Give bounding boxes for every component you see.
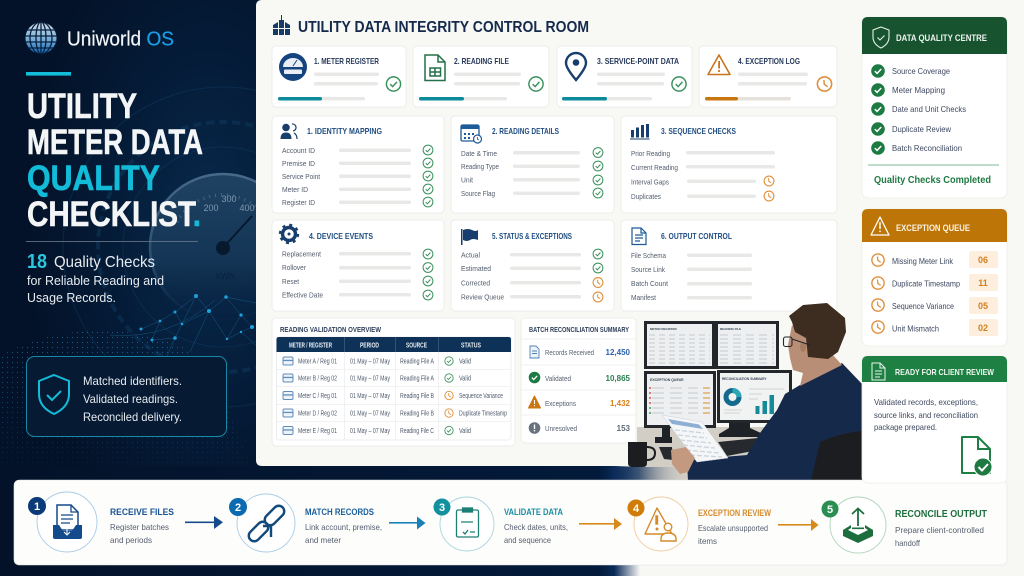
monitor: reading file [715, 321, 779, 369]
process strip [14, 480, 1007, 565]
row: validated: Validated [545, 374, 571, 383]
table: validation rows: 01 May – 07 May [350, 358, 390, 366]
callout: matched identifiers: Validated readings. [83, 392, 178, 406]
icon: shield [873, 27, 889, 48]
title: Utility Meter Data Quality Checklist: CHECKLIST. [27, 195, 201, 234]
panel: data quality centre: Source Coverage [892, 66, 950, 76]
panel: identity mapping: Premise ID [282, 159, 316, 168]
icon: location pin [566, 53, 586, 80]
subtitle: 18 quality checks: for Reliable Reading and [27, 273, 164, 288]
panel: identity mapping [272, 116, 444, 213]
panel: device events: Replacement [282, 250, 322, 258]
panel: status and exceptions: Review Queue [461, 292, 504, 302]
step 5: reconcile output: 5 [827, 504, 833, 516]
icon: people [280, 124, 297, 139]
icon: output tray [843, 508, 873, 543]
panel header [862, 17, 1007, 54]
icon: flag [461, 229, 478, 245]
icon: spreadsheet file [425, 55, 445, 80]
heading: control room: UTILITY DATA INTEGRITY CONTROL ROOM [298, 19, 589, 36]
panel: sequence checks: Prior Reading [631, 149, 670, 158]
hand [671, 447, 695, 474]
table: validation rows: Duplicate Timestamp [459, 410, 507, 418]
decorative meter gauge: kWh [216, 271, 234, 281]
table: validation rows: Meter C / Reg 01 [298, 393, 337, 400]
arrow: step 1 to 2 [185, 516, 223, 529]
panel: identity mapping: Meter ID [282, 185, 309, 194]
analyst [687, 303, 862, 481]
row: validated: 10,865 [606, 374, 631, 383]
icon: calendar clock [461, 125, 482, 143]
panel: status and exceptions: 5. STATUS & EXCEPTIONS [492, 231, 572, 241]
step 2: match records: Link account, premise, [305, 522, 382, 532]
monitor: reading file: READING FILE [720, 327, 741, 331]
row: exceptions: 1,432 [610, 399, 631, 408]
panel: output control: Manifest [631, 293, 657, 302]
panel header [862, 209, 1007, 242]
monitor: reconciliation summary [717, 370, 792, 423]
panel: output control: Source Link [631, 265, 665, 274]
title: Utility Meter Data Quality Checklist [27, 87, 203, 234]
step 1: receive files: RECEIVE FILES [110, 507, 174, 518]
table: validation rows: Meter B / Reg 02 [298, 376, 337, 382]
table: validation rows: 01 May – 07 May [350, 393, 390, 400]
card: exception log: 4. EXCEPTION LOG [738, 56, 800, 66]
logo: Uniworld OS [25, 22, 174, 54]
row: unresolved [529, 422, 631, 434]
accent bar [26, 72, 71, 76]
icon: document [872, 363, 885, 380]
table: validation rows: Valid [459, 376, 471, 382]
monitor: exception queue: EXCEPTION QUEUE [650, 378, 684, 382]
decorative meter gauge: 200 [203, 203, 219, 213]
panel: output control: Batch Count [631, 279, 669, 288]
table: validation rows: Reading File B [400, 393, 434, 400]
panel: reading validation overview: READING VALIDATION OVERVIEW [280, 325, 382, 334]
panel: exception queue: Duplicate Timestamp [892, 278, 960, 288]
step 3: validate data: 3 [439, 502, 445, 514]
panel: status and exceptions: Actual [461, 250, 480, 260]
icon: document [632, 228, 646, 244]
monitor: exception queue [644, 371, 716, 428]
table header: STATUS [461, 342, 481, 350]
panel: output control: 6. OUTPUT CONTROL [661, 231, 732, 241]
panel: batch reconciliation summary: BATCH RECONCILIATION SUMMARY [529, 325, 629, 334]
keyboard and mouse [659, 438, 758, 460]
subtitle: 18 quality checks: Quality Checks [54, 254, 155, 271]
review text [874, 397, 978, 432]
table: validation rows: Reading File B [400, 410, 434, 418]
arrow: step 2 to 3 [389, 516, 426, 530]
panel: reading details: Date & Time [461, 149, 497, 158]
icon: clipboard checklist [456, 508, 478, 537]
panel header: DATA QUALITY CENTRE [896, 33, 987, 43]
table: validation rows: Meter E / Reg 01 [298, 428, 337, 435]
panel header: READY FOR CLIENT REVIEW [895, 367, 995, 377]
step 4: exception review: items [698, 536, 717, 546]
panel: output control [621, 220, 837, 311]
table: validation rows: 01 May – 07 May [350, 428, 390, 435]
panel: data quality centre: Duplicate Review [892, 124, 952, 134]
row: records received: Records Received [545, 348, 594, 357]
table: validation rows: Reading File A [400, 358, 434, 366]
icon: warning [871, 217, 889, 235]
step 4: exception review: Escalate unsupported [698, 523, 768, 533]
card: meter register [272, 46, 406, 107]
step 2: match records: and meter [305, 535, 341, 545]
table: validation rows: Reading File A [400, 376, 434, 382]
panel: identity mapping: Register ID [282, 198, 316, 207]
chair [811, 431, 862, 481]
panel: status and exceptions: Estimated [461, 264, 491, 273]
table: validation rows: Valid [459, 358, 471, 366]
table: validation rows: 01 May – 07 May [350, 410, 390, 418]
desk [612, 427, 812, 481]
panel: reading details [451, 116, 614, 213]
card: service-point data: 3. SERVICE-POINT DATA [597, 56, 679, 66]
main control room panel [256, 0, 1024, 480]
panel: device events [272, 220, 444, 311]
step 2: match records: MATCH RECORDS [305, 507, 374, 518]
step 2: match records [229, 494, 382, 552]
icon: shield check [39, 375, 69, 414]
panel: sequence checks: Current Reading [631, 163, 678, 172]
panel: sequence checks [621, 116, 837, 213]
panel: sequence checks: Duplicates [631, 192, 661, 201]
panel: identity mapping: Account ID [282, 146, 316, 155]
panel: data quality centre: Batch Reconciliation [892, 143, 962, 153]
table: validation rows: Valid [459, 428, 471, 435]
icon: file inbox [53, 505, 82, 539]
panel: ready for client review [862, 356, 1007, 483]
card: meter register: 1. METER REGISTER [314, 56, 379, 66]
icon: gear [280, 225, 298, 243]
step 5: reconcile output [822, 497, 987, 553]
step 5: reconcile output: Prepare client-controlled [895, 525, 984, 535]
monitor: reconciliation summary: RECONCILIATION SUMMARY [722, 377, 767, 381]
divider line [26, 240, 198, 243]
photo: analyst at monitors [612, 303, 862, 481]
monitor stands [655, 423, 763, 443]
card: exception log [699, 46, 837, 107]
panel header: EXCEPTION QUEUE [896, 223, 970, 233]
step 1: receive files: and periods [110, 535, 152, 545]
step 4: exception review: 4 [633, 503, 640, 515]
table: validation rows: Sequence Variance [459, 393, 503, 400]
icon: warning with person [645, 508, 676, 541]
callout: matched identifiers [26, 356, 226, 436]
panel: reading details: Reading Type [461, 162, 499, 171]
table header [276, 337, 511, 352]
table header: SOURCE [406, 342, 427, 350]
card: service-point data [557, 46, 692, 107]
review text: Validated records, exceptions, [874, 397, 978, 407]
panel: exception queue [862, 209, 1007, 346]
row: unresolved: 153 [617, 424, 631, 433]
monitor: meter register: METER REGISTER [650, 327, 678, 331]
arrow: step 3 to 4 [579, 518, 622, 530]
panel: status and exceptions [451, 220, 614, 311]
step 4: exception review [628, 497, 771, 551]
logo: Uniworld OS: Uniworld OS [67, 28, 174, 50]
row: records received: 12,450 [606, 348, 631, 357]
paper document [662, 415, 728, 462]
title: Utility Meter Data Quality Checklist: QUALITY [27, 159, 160, 198]
table: validation rows: 01 May – 07 May [350, 376, 390, 382]
card: reading file: 2. READING FILE [454, 56, 509, 66]
panel: batch reconciliation summary [521, 318, 636, 443]
card: reading file [413, 46, 549, 107]
panel: exception queue: Unit Mismatch [892, 324, 939, 334]
panel: exception queue: 05 [978, 301, 988, 311]
table: validation rows: Meter D / Reg 02 [298, 410, 337, 418]
step 3: validate data: and sequence [504, 535, 551, 545]
step 5: reconcile output: handoff [895, 538, 921, 548]
panel: exception queue: 02 [978, 323, 988, 333]
panel: data quality centre: Meter Mapping [892, 85, 945, 95]
table header: METER / REGISTER [289, 342, 332, 350]
panel: data quality centre [862, 17, 1007, 198]
row: validated [529, 372, 631, 383]
step 1: receive files: Register batches [110, 522, 169, 532]
mug [628, 442, 655, 467]
icon: chain link [246, 503, 287, 544]
panel: exception queue: Sequence Variance [892, 301, 954, 311]
panel: sequence checks: 3. SEQUENCE CHECKS [661, 126, 736, 136]
panel: exception queue: Missing Meter Link [892, 256, 954, 266]
panel: device events: 4. DEVICE EVENTS [309, 231, 373, 241]
panel: device events: Reset [282, 277, 300, 286]
heading: control room [273, 15, 589, 36]
panel: device events: Rollover [282, 263, 306, 272]
panel: identity mapping: Service Point [282, 172, 321, 181]
panel: exception queue: 11 [978, 278, 988, 288]
decorative data network [110, 294, 256, 356]
icon: meter dial [279, 53, 307, 81]
arrow: step 4 to 5 [778, 519, 818, 531]
monitor: meter register [644, 321, 715, 369]
panel header [862, 356, 1007, 382]
decorative meter gauge: 400 [239, 203, 255, 213]
panel: reading details: Source Flag [461, 189, 495, 198]
panel: data quality centre: Quality Checks Completed [874, 174, 991, 186]
panel: reading details: Unit [461, 176, 474, 184]
row: records received [530, 346, 631, 358]
panel: identity mapping: 1. IDENTITY MAPPING [307, 126, 382, 136]
panel: exception queue: 06 [978, 255, 988, 265]
panel: reading validation overview [272, 318, 515, 446]
panel: status and exceptions: Corrected [461, 278, 490, 288]
table: validation rows: Meter A / Reg 01 [298, 358, 337, 366]
review text: package prepared. [874, 422, 937, 432]
icon: bar chart [630, 124, 650, 140]
step 1: receive files [28, 492, 174, 552]
callout: matched identifiers: Matched identifiers. [83, 374, 182, 388]
step 5: reconcile output: RECONCILE OUTPUT [895, 509, 987, 520]
subtitle: 18 quality checks: 18 [27, 251, 47, 273]
lower background band [0, 466, 1024, 576]
panel: output control: File Schema [631, 251, 667, 260]
table: validation rows: Reading File C [400, 428, 434, 435]
panel: sequence checks: Interval Gaps [631, 178, 669, 186]
panel: reading details: 2. READING DETAILS [492, 126, 559, 136]
title: Utility Meter Data Quality Checklist: UTILITY [27, 87, 137, 126]
icon: control building [273, 15, 290, 35]
step 4: exception review: EXCEPTION REVIEW [698, 508, 771, 519]
subtitle: 18 quality checks: Usage Records. [27, 290, 116, 305]
title: Utility Meter Data Quality Checklist: METER DATA [27, 123, 203, 162]
panel: device events: Effective Date [282, 290, 323, 300]
icon: document approved [962, 437, 992, 476]
decorative meter gauge [63, 87, 383, 407]
step 1: receive files: 1 [34, 501, 40, 513]
callout: matched identifiers: Reconciled delivery. [83, 410, 182, 424]
review text: source links, and reconciliation [874, 410, 978, 420]
table: validation rows [276, 337, 511, 440]
panel: data quality centre: Date and Unit Checks [892, 104, 966, 114]
table header: PERIOD [360, 342, 379, 350]
step 2: match records: 2 [235, 502, 241, 514]
row: exceptions [528, 396, 631, 408]
subtitle: 18 quality checks [27, 251, 164, 305]
step 3: validate data: Check dates, units, [504, 522, 568, 532]
step 3: validate data [434, 497, 568, 551]
row: unresolved: Unresolved [545, 424, 577, 433]
step 3: validate data: VALIDATE DATA [504, 507, 563, 518]
icon: warning triangle [708, 55, 730, 74]
decorative meter gauge: 300 [221, 194, 237, 204]
decorative data dots wave [2, 332, 248, 463]
row: exceptions: Exceptions [545, 399, 576, 408]
